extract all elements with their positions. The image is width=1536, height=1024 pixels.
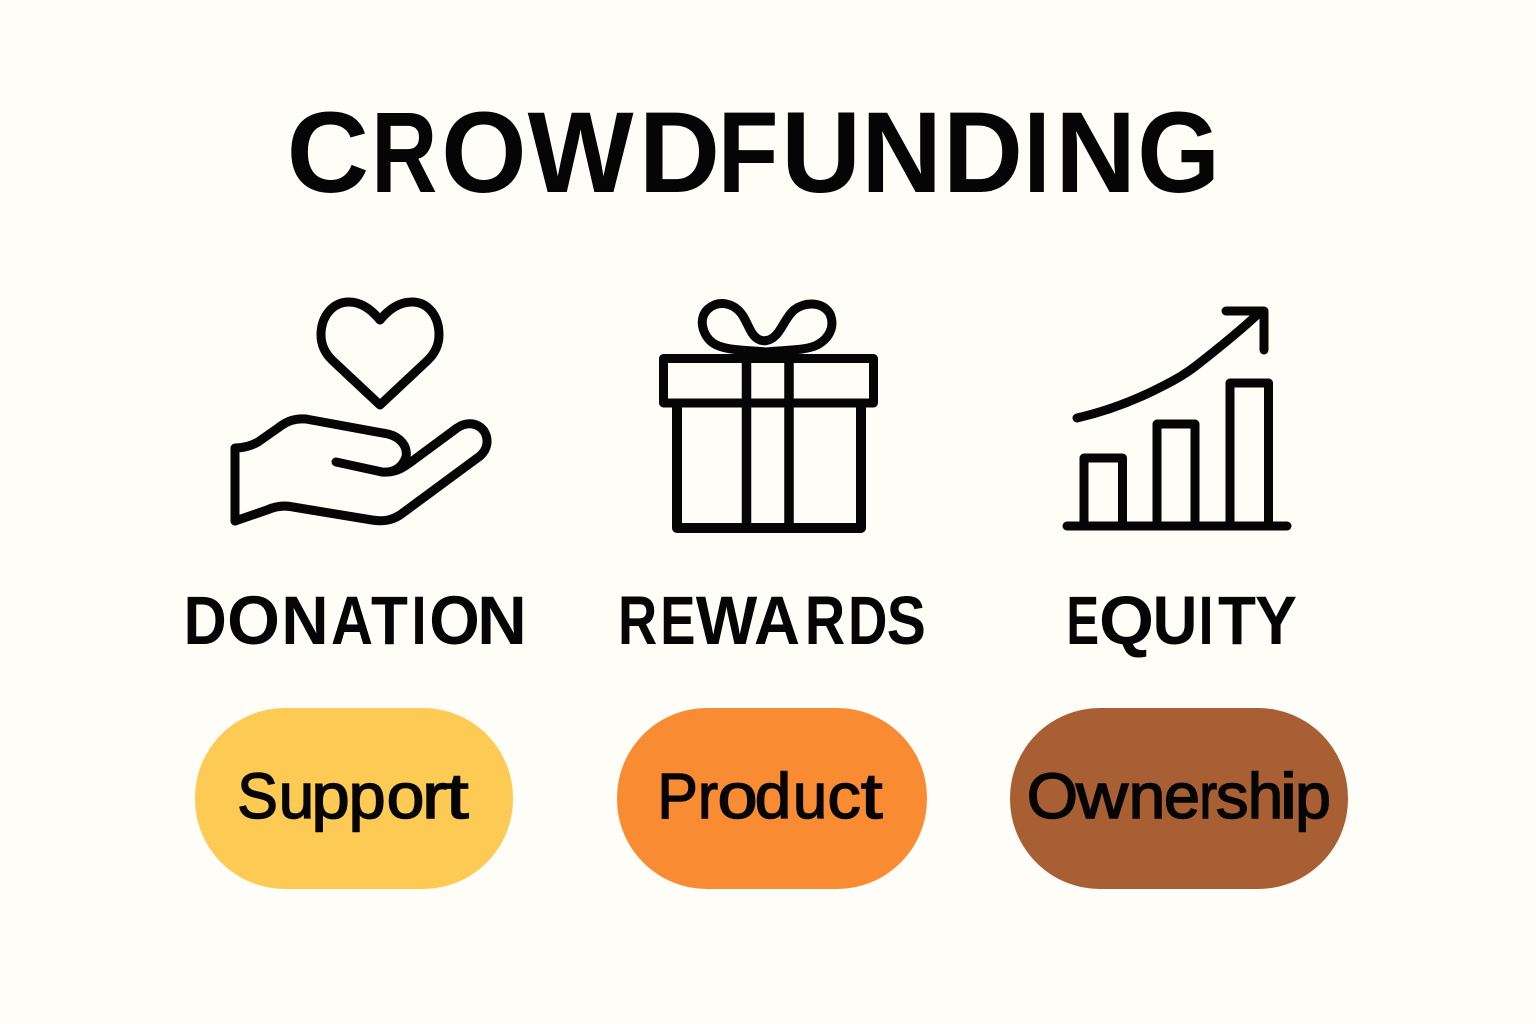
title: I (1024, 88, 1050, 217)
label: donation: A (331, 583, 373, 659)
label: equity: U (1153, 583, 1197, 659)
pill: product: u (793, 760, 827, 832)
pill: support: r (422, 760, 447, 832)
pill: support (195, 708, 513, 889)
icon: gift box (664, 304, 874, 528)
pill: ownership: w (1075, 760, 1129, 832)
title: N (1055, 88, 1136, 217)
pill: support: o (387, 760, 424, 832)
label: equity: Q (1099, 583, 1154, 659)
pill: ownership: i (1280, 760, 1297, 832)
icon: hand holding heart (235, 302, 487, 521)
pill: support: t (446, 760, 469, 832)
label: rewards: R (805, 583, 845, 659)
pill: support: p (349, 760, 386, 832)
label: equity: I (1198, 583, 1214, 659)
label: donation: I (411, 583, 427, 659)
pill: ownership: p (1295, 760, 1331, 832)
pill: product: o (718, 760, 758, 832)
pill: support: S (237, 760, 278, 832)
label: donation: D (184, 583, 227, 659)
title: C (287, 88, 369, 217)
pill: ownership (1010, 708, 1348, 889)
title: W (528, 88, 634, 217)
label: rewards: S (887, 583, 926, 659)
pill: ownership: e (1164, 760, 1200, 832)
title: U (781, 88, 861, 217)
icon: growth bar chart (1067, 311, 1287, 526)
label: donation: N (477, 583, 527, 659)
label: donation: N (281, 583, 329, 659)
pill: support: u (279, 760, 314, 832)
label: donation: O (429, 583, 480, 659)
pill: ownership: O (1027, 760, 1078, 832)
pill: ownership: s (1216, 760, 1249, 832)
label: donation: T (371, 583, 408, 659)
label: equity: Y (1255, 583, 1297, 659)
label: rewards: D (848, 583, 887, 659)
label: rewards: W (696, 583, 758, 659)
title: O (441, 88, 527, 217)
title: D (639, 88, 720, 217)
pill: product: c (828, 760, 861, 832)
title: F (718, 88, 778, 217)
pill: product: P (657, 760, 698, 832)
pill: product: t (861, 760, 883, 832)
label: rewards: E (660, 583, 695, 659)
pill: ownership: n (1129, 760, 1165, 832)
label: equity: E (1066, 583, 1099, 659)
pill: product: r (698, 760, 718, 832)
label: equity: T (1218, 583, 1256, 659)
label: rewards: R (618, 583, 657, 659)
title: G (1137, 88, 1220, 217)
label: rewards: A (754, 583, 800, 659)
pill: support: p (312, 760, 350, 832)
title: N (861, 88, 942, 217)
pill: ownership: r (1200, 760, 1217, 832)
pill: product: d (755, 760, 791, 832)
pill: ownership: h (1248, 760, 1283, 832)
title: D (943, 88, 1023, 217)
label: donation: O (227, 583, 280, 659)
pill: product (617, 708, 927, 889)
title: R (371, 88, 437, 217)
